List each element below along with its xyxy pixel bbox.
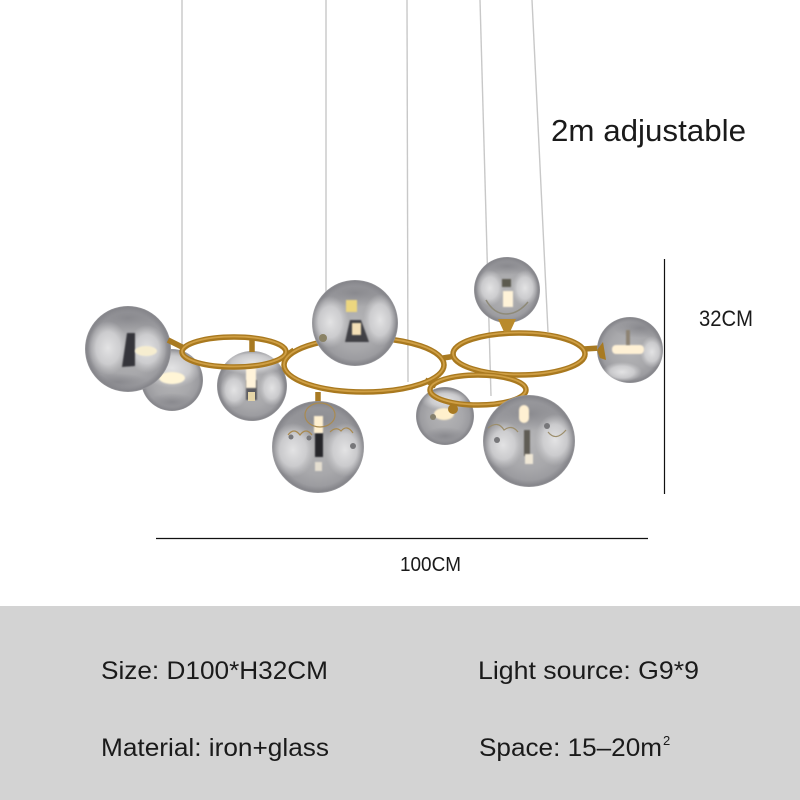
spec: space: Space: 15–20m — [479, 734, 662, 762]
panel: specifications — [0, 606, 800, 800]
spec: light source: Light source: G9*9 — [478, 657, 699, 685]
connectors — [168, 318, 600, 405]
ball: far left large — [85, 302, 171, 392]
ring: right — [453, 333, 585, 375]
spec: material: Material: iron+glass — [101, 734, 329, 762]
label: cord length: 2m adjustable — [551, 113, 746, 148]
ball: upper centre large — [311, 279, 398, 366]
spec: space: 2 — [663, 733, 670, 748]
ball: lower right large — [483, 395, 575, 487]
ball: far left lower — [141, 348, 203, 411]
ball: lower right small — [416, 387, 474, 445]
ring: centre — [284, 338, 444, 392]
ball: inner left — [217, 349, 287, 421]
label: height: 32CM — [699, 306, 753, 331]
ball: far right — [597, 317, 666, 383]
ball: top right — [474, 257, 540, 332]
label: width: 100CM — [400, 554, 461, 576]
ring: lower right — [430, 375, 526, 405]
ball: lower centre large — [271, 400, 365, 493]
ring: left — [182, 337, 286, 367]
rings: gold frame — [168, 318, 600, 405]
height dimension line — [664, 259, 666, 494]
spec: size: Size: D100*H32CM — [101, 657, 328, 685]
width dimension line — [156, 538, 648, 540]
hanging cords — [182, 0, 548, 396]
